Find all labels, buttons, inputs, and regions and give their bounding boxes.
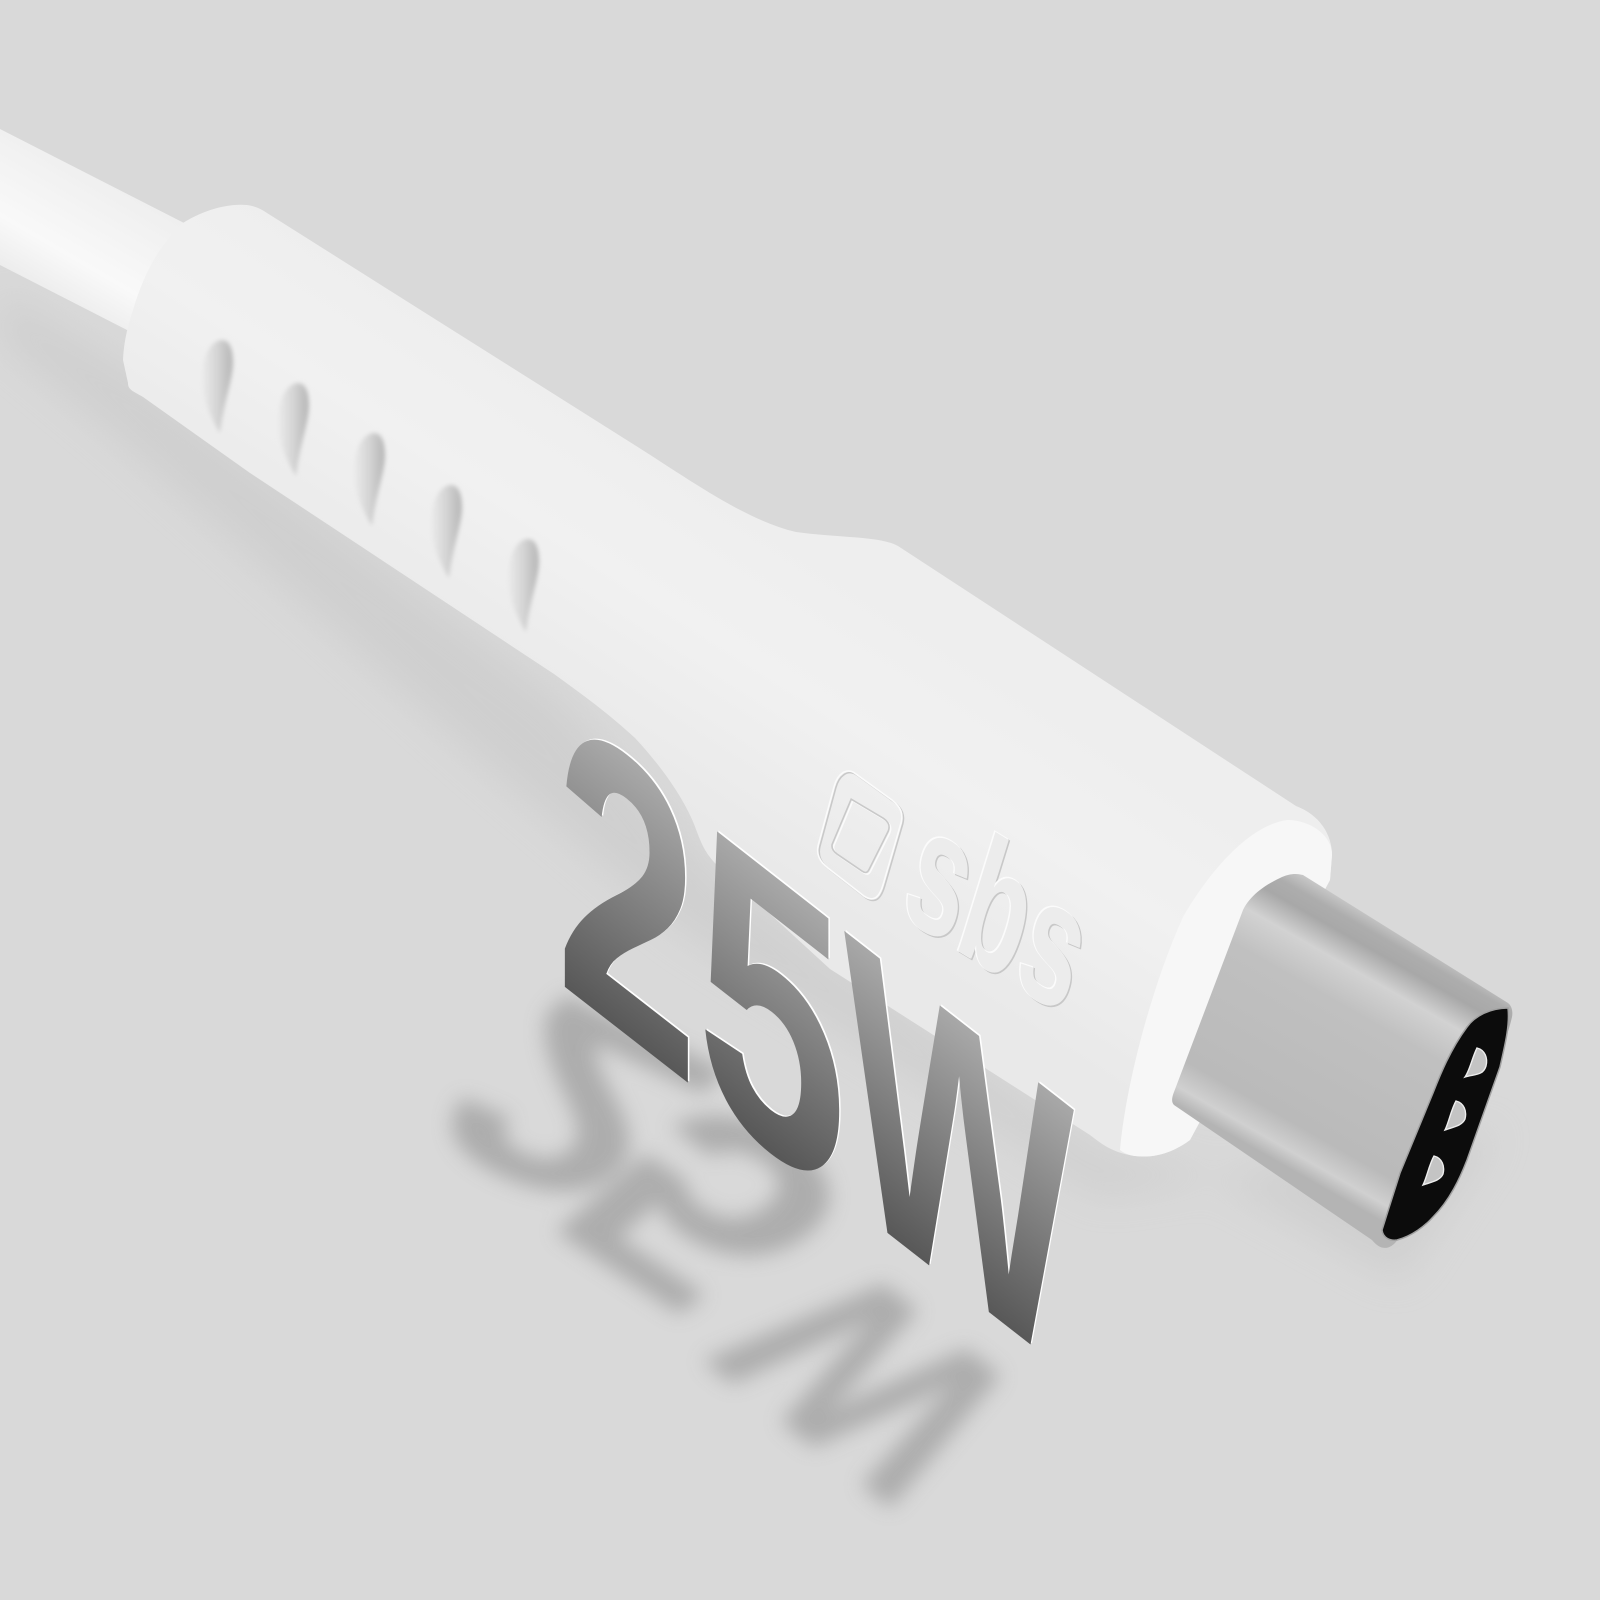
groove 2 [278,383,309,476]
USB-C connector [1172,874,1512,1248]
metal shell [1172,874,1512,1248]
digit 5: 5 [698,728,848,1294]
groove 1 [202,340,233,433]
groove 5 [508,539,539,632]
digit 5: 5 [697,729,847,1295]
collar end face [1120,820,1332,1157]
logo icon: rounded square [818,771,904,900]
letter W: W [846,844,1078,1462]
headline 25W [556,617,1078,1463]
embossed sbs logo [818,764,1112,1052]
logo wordmark sbs: sbs [886,764,1110,1050]
strain relief body [123,205,1332,1157]
groove 4 [431,485,462,578]
logo wordmark sbs: sbs [888,766,1112,1052]
cable soft shadow [0,290,1500,1280]
digit 2: 2 [556,618,698,1177]
dark port opening [1382,1008,1508,1240]
mirrored blurred shadow of 25W [365,947,1083,1542]
cable [0,129,230,330]
contact 1 [1465,1048,1487,1077]
mirrored blurred shadow of 25W: 2 [365,947,784,1260]
digit 2: 2 [558,617,700,1176]
letter W: W [844,845,1076,1463]
contact 3 [1423,1156,1444,1185]
groove 3 [354,433,385,526]
mirrored blurred shadow of 25W: 5 [481,1048,924,1367]
logo wordmark sbs: sbs [887,765,1111,1051]
mirrored blurred shadow of 25W: W [658,1223,1083,1542]
contact 2 [1445,1101,1466,1130]
